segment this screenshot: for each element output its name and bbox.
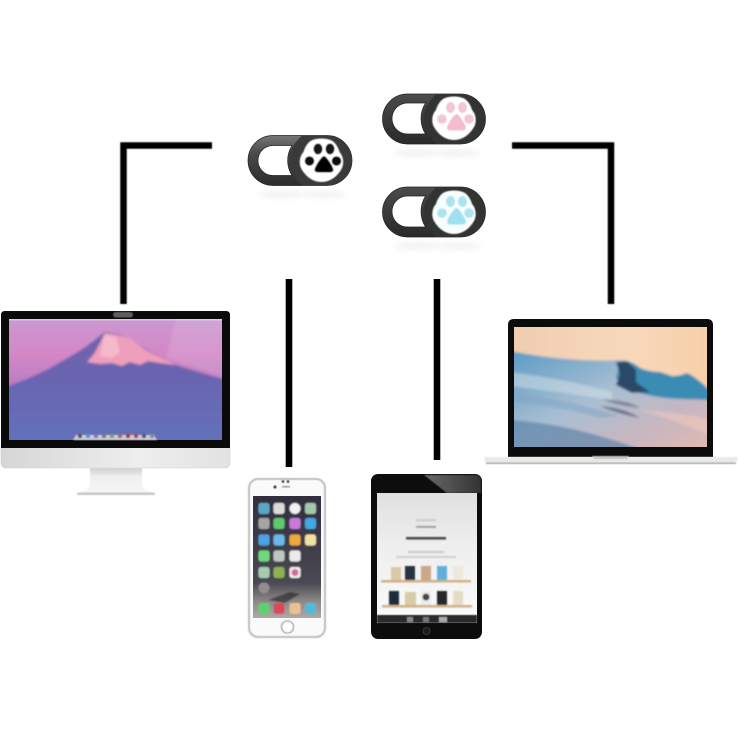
laptop screen: wave wallpaper bbox=[510, 323, 711, 451]
laptop base bbox=[484, 456, 738, 464]
device: laptop bbox=[484, 319, 738, 464]
device: desktop monitor bbox=[1, 311, 230, 495]
connector line: top left to desktop bbox=[124, 146, 212, 304]
tablet body bbox=[371, 474, 482, 639]
device: smartphone bbox=[249, 479, 325, 637]
webcam cover: pink paw bbox=[382, 94, 486, 157]
connector line: top right to laptop bbox=[512, 146, 611, 304]
connector line: to phone bbox=[286, 279, 292, 467]
monitor screen dock bbox=[73, 434, 157, 440]
tablet glare bbox=[424, 475, 481, 493]
webcam cover: black paw bbox=[248, 136, 352, 198]
tablet home button bbox=[423, 628, 430, 634]
phone body bbox=[249, 479, 325, 637]
tablet toolbar bbox=[377, 615, 477, 623]
phone earpiece and camera bbox=[274, 480, 290, 488]
webcam cover on monitor bbox=[113, 312, 133, 318]
monitor stand bbox=[77, 468, 155, 495]
tablet screen bbox=[377, 493, 477, 623]
tablet shelf with books: lower bbox=[382, 591, 472, 608]
infographic: webcam covers and devices bbox=[0, 94, 738, 639]
monitor chin bbox=[1, 447, 230, 468]
device: tablet bbox=[371, 474, 482, 639]
tablet shelf with books: upper bbox=[381, 566, 471, 582]
webcam cover: blue paw bbox=[382, 187, 486, 250]
phone screen with app icons bbox=[253, 496, 321, 618]
monitor screen: mountain wallpaper bbox=[5, 315, 226, 444]
tablet heading lines bbox=[396, 519, 456, 558]
connector line: to tablet bbox=[434, 279, 440, 460]
laptop lid bbox=[508, 319, 713, 457]
phone home button bbox=[282, 621, 294, 633]
monitor bezel bbox=[1, 311, 230, 448]
